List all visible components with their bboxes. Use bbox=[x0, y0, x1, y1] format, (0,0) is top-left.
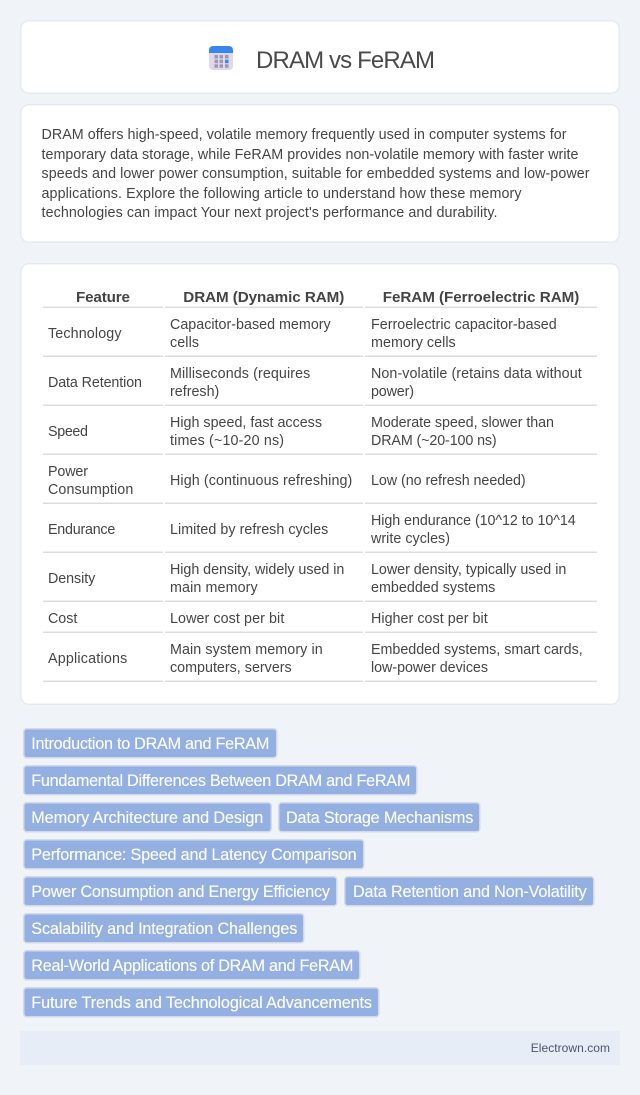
table header row: DRAM (Dynamic RAM) bbox=[183, 289, 344, 306]
row: cost: Lower cost per bit bbox=[170, 611, 284, 627]
row: power consumption: Consumption bbox=[48, 482, 133, 498]
chip: introduction bbox=[24, 729, 277, 758]
row: data retention: power) bbox=[371, 384, 414, 400]
row: data retention bbox=[48, 366, 582, 400]
chip: future trends: Future Trends and Technological Advancements bbox=[31, 994, 372, 1012]
table header row: Feature bbox=[76, 289, 130, 306]
footer bbox=[20, 1031, 620, 1065]
row: power consumption bbox=[48, 464, 526, 498]
row: density: main memory bbox=[170, 580, 259, 596]
intro text: applications. Explore the following article to understand how these memory bbox=[42, 186, 522, 202]
panel: introduction bbox=[21, 105, 619, 242]
row: technology: Technology bbox=[48, 326, 122, 342]
row: technology: Ferroelectric capacitor-based bbox=[371, 317, 557, 333]
row: applications: computers, servers bbox=[170, 660, 292, 676]
row: technology: memory cells bbox=[371, 335, 456, 351]
row: speed: High speed, fast access bbox=[170, 415, 322, 431]
table header row bbox=[76, 289, 579, 306]
chip: data storage: Data Storage Mechanisms bbox=[286, 809, 473, 827]
row: endurance: Limited by refresh cycles bbox=[170, 522, 328, 538]
row: density: Density bbox=[48, 571, 96, 587]
row: speed: Moderate speed, slower than bbox=[371, 415, 554, 431]
chip: real-world applications: Real-World Applications of DRAM and FeRAM bbox=[31, 957, 353, 975]
row: endurance: High endurance (10^12 to 10^14 bbox=[371, 513, 576, 529]
row: applications bbox=[48, 642, 583, 676]
chip: future trends bbox=[24, 988, 379, 1017]
intro text: speeds and lower power consumption, suitable for embedded systems and low-power bbox=[42, 166, 590, 182]
row: cost bbox=[48, 611, 488, 627]
row: data retention: refresh) bbox=[170, 384, 219, 400]
row: applications: Applications bbox=[48, 651, 127, 667]
chip: memory architecture bbox=[24, 803, 271, 832]
row: technology bbox=[48, 317, 557, 351]
chip: data retention: Data Retention and Non-Volatility bbox=[353, 883, 588, 901]
row: technology: cells bbox=[170, 335, 199, 351]
chip: power consumption: Power Consumption and Energy Efficiency bbox=[31, 883, 331, 901]
row: data retention: Non-volatile (retains data without bbox=[371, 366, 582, 382]
chip: performance: Performance: Speed and Latency Comparison bbox=[31, 846, 357, 864]
row: endurance: Endurance bbox=[48, 522, 115, 538]
chip: power consumption bbox=[24, 877, 337, 906]
row: power consumption: Low (no refresh needed) bbox=[371, 473, 526, 489]
footer: Electrown.com bbox=[531, 1041, 610, 1055]
chip: real-world applications bbox=[24, 951, 360, 980]
row: endurance: write cycles) bbox=[370, 531, 450, 547]
row: density: Lower density, typically used in bbox=[371, 562, 566, 578]
header panel bbox=[21, 21, 619, 93]
row: density bbox=[48, 562, 566, 596]
intro text: technologies can impact Your next project's performance and durability. bbox=[42, 205, 498, 221]
chip: scalability bbox=[24, 914, 304, 943]
intro text: DRAM offers high-speed, volatile memory frequently used in computer systems for bbox=[42, 127, 567, 143]
topic chips bbox=[24, 729, 594, 1017]
intro text bbox=[42, 127, 590, 221]
intro text: temporary data storage, while FeRAM provides non-volatile memory with faster write bbox=[42, 147, 579, 163]
chip: introduction: Introduction to DRAM and FeRAM bbox=[31, 735, 269, 753]
chip: scalability: Scalability and Integration Challenges bbox=[31, 920, 297, 938]
row: applications: low-power devices bbox=[371, 660, 488, 676]
row: density: embedded systems bbox=[371, 580, 495, 596]
row: speed: DRAM (~20-100 ns) bbox=[371, 433, 497, 449]
table header row: FeRAM (Ferroelectric RAM) bbox=[383, 289, 579, 306]
chip: fundamental differences: Fundamental Differences Between DRAM and FeRAM bbox=[31, 772, 410, 790]
row: cost: Higher cost per bit bbox=[371, 611, 488, 627]
row: applications: Embedded systems, smart cards, bbox=[371, 642, 583, 658]
row: speed bbox=[48, 415, 554, 449]
chip: data retention bbox=[345, 877, 594, 906]
row: data retention: Data Retention bbox=[48, 375, 142, 391]
chip: fundamental differences bbox=[24, 766, 417, 795]
icon: memory chip calendar bbox=[209, 46, 233, 70]
chip: performance bbox=[24, 840, 364, 869]
row: speed: Speed bbox=[48, 424, 88, 440]
row: applications: Main system memory in bbox=[170, 642, 323, 658]
row: speed: times (~10-20 ns) bbox=[170, 433, 284, 449]
row: endurance bbox=[48, 513, 576, 547]
chip: memory architecture: Memory Architecture and Design bbox=[31, 809, 263, 827]
row: power consumption: High (continuous refreshing) bbox=[170, 473, 352, 489]
row: power consumption: Power bbox=[48, 464, 88, 480]
panel: comparison table bbox=[21, 264, 619, 704]
row: technology: Capacitor-based memory bbox=[170, 317, 332, 333]
row: cost: Cost bbox=[48, 611, 77, 627]
title: DRAM vs FeRAM bbox=[256, 47, 435, 74]
row: data retention: Milliseconds (requires bbox=[170, 366, 310, 382]
row: density: High density, widely used in bbox=[170, 562, 344, 578]
chip: data storage bbox=[279, 803, 480, 832]
